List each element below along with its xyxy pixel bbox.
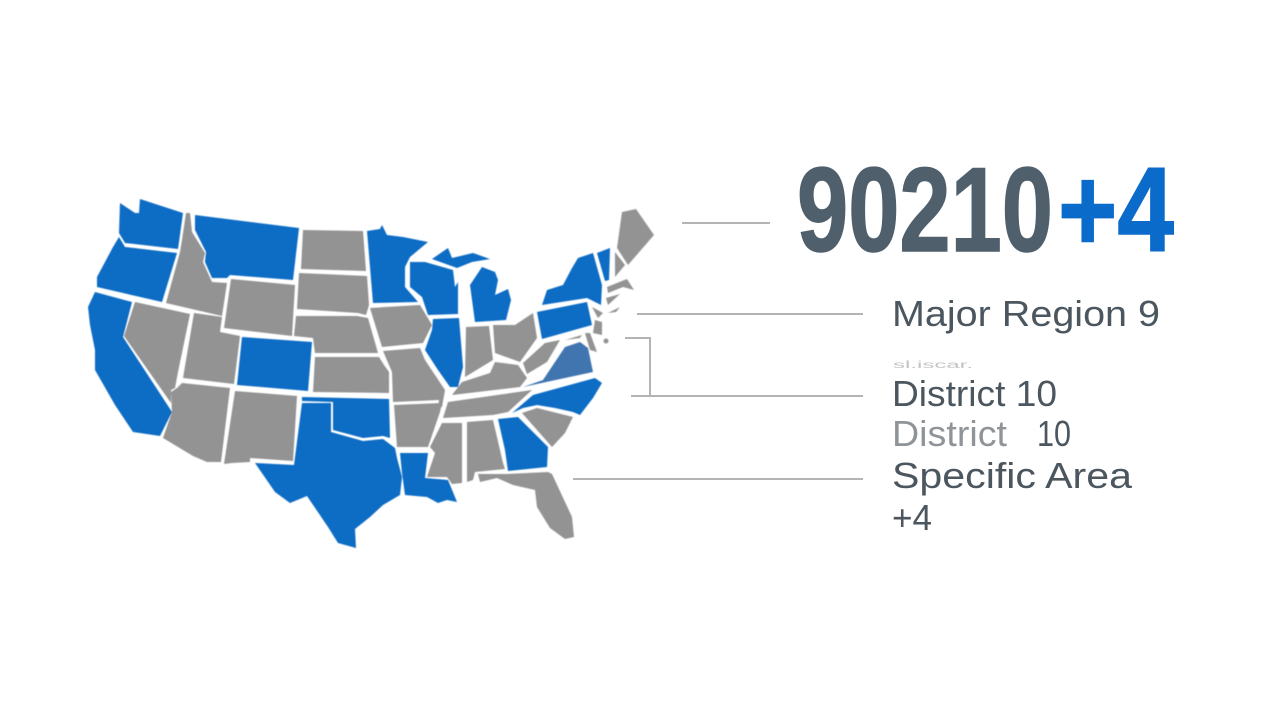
state: Colorado (237, 337, 312, 391)
state: Alabama (467, 420, 505, 482)
state: Virginia (523, 342, 593, 387)
faded word: District (892, 413, 1007, 454)
state: North Carolina (512, 378, 602, 415)
state: Vermont (597, 248, 610, 281)
label: Specific Area: Specific Area (892, 455, 1133, 496)
state: Arizona (163, 383, 230, 462)
state: Michigan upper peninsula (432, 248, 490, 268)
label: District 10: District 10 (892, 373, 1057, 414)
state: Oklahoma (302, 397, 390, 438)
state: Arkansas (394, 403, 442, 447)
state: Wisconsin (410, 262, 458, 315)
title: ZIP code 90210+4 (797, 143, 1174, 277)
state: Massachusetts (607, 279, 634, 293)
state: Mississippi (427, 423, 462, 484)
state: South Carolina (522, 408, 573, 447)
state: Oregon (97, 237, 177, 302)
state: Wyoming (224, 279, 295, 336)
state: Florida (478, 472, 574, 539)
leader line: major region (637, 313, 863, 315)
state: Michigan lower peninsula (470, 267, 511, 322)
state: New Jersey (592, 307, 603, 318)
state: Montana (195, 215, 299, 280)
island dot (604, 338, 608, 344)
leader line: specific area (573, 478, 863, 480)
leader line: to ZIP code (682, 222, 770, 224)
label: +4: +4 (892, 497, 932, 538)
leader line: district with bracket (625, 338, 863, 396)
state: West Virginia (523, 340, 560, 374)
state: Maryland (565, 335, 582, 340)
title digits: 90210 (797, 143, 1053, 277)
state: New York (542, 253, 602, 305)
state: Indiana (465, 326, 493, 377)
state: Missouri (383, 348, 445, 407)
state: Ohio (493, 313, 537, 362)
state: New Hampshire (615, 252, 625, 277)
label: District 10 faded (892, 413, 1071, 454)
state: Minnesota (367, 225, 428, 303)
state: Pennsylvania (537, 302, 592, 339)
state: Washington (119, 199, 183, 249)
state: Virginia eastern shore (585, 333, 597, 352)
state: Iowa (370, 305, 432, 347)
state: Long Island (608, 307, 620, 313)
state: Nebraska (294, 316, 378, 353)
state: Illinois (425, 318, 463, 387)
state: Louisiana (400, 453, 457, 503)
state: Nevada (124, 302, 190, 403)
state: Kentucky (452, 362, 527, 395)
state: New Mexico (224, 391, 297, 464)
state: Idaho (166, 213, 227, 316)
number 10: 10 (1037, 413, 1071, 454)
title suffix: +4 (1058, 143, 1174, 277)
state: Tennessee (443, 390, 532, 418)
state: South Dakota (297, 273, 369, 315)
state: Texas (255, 403, 402, 548)
state: Maine (617, 209, 654, 265)
state: Connecticut and Rhode Island (606, 294, 620, 305)
state: Kansas (313, 357, 389, 393)
state: Utah (183, 313, 240, 384)
label: Major Region 9: Major Region 9 (892, 293, 1160, 334)
state: California (88, 292, 172, 436)
faint label artifact: sl.iscar. (893, 360, 973, 371)
state: Delaware (593, 320, 602, 335)
state: Georgia (498, 417, 548, 471)
state: North Dakota (301, 230, 366, 271)
map: United States with highlighted states (88, 199, 654, 548)
